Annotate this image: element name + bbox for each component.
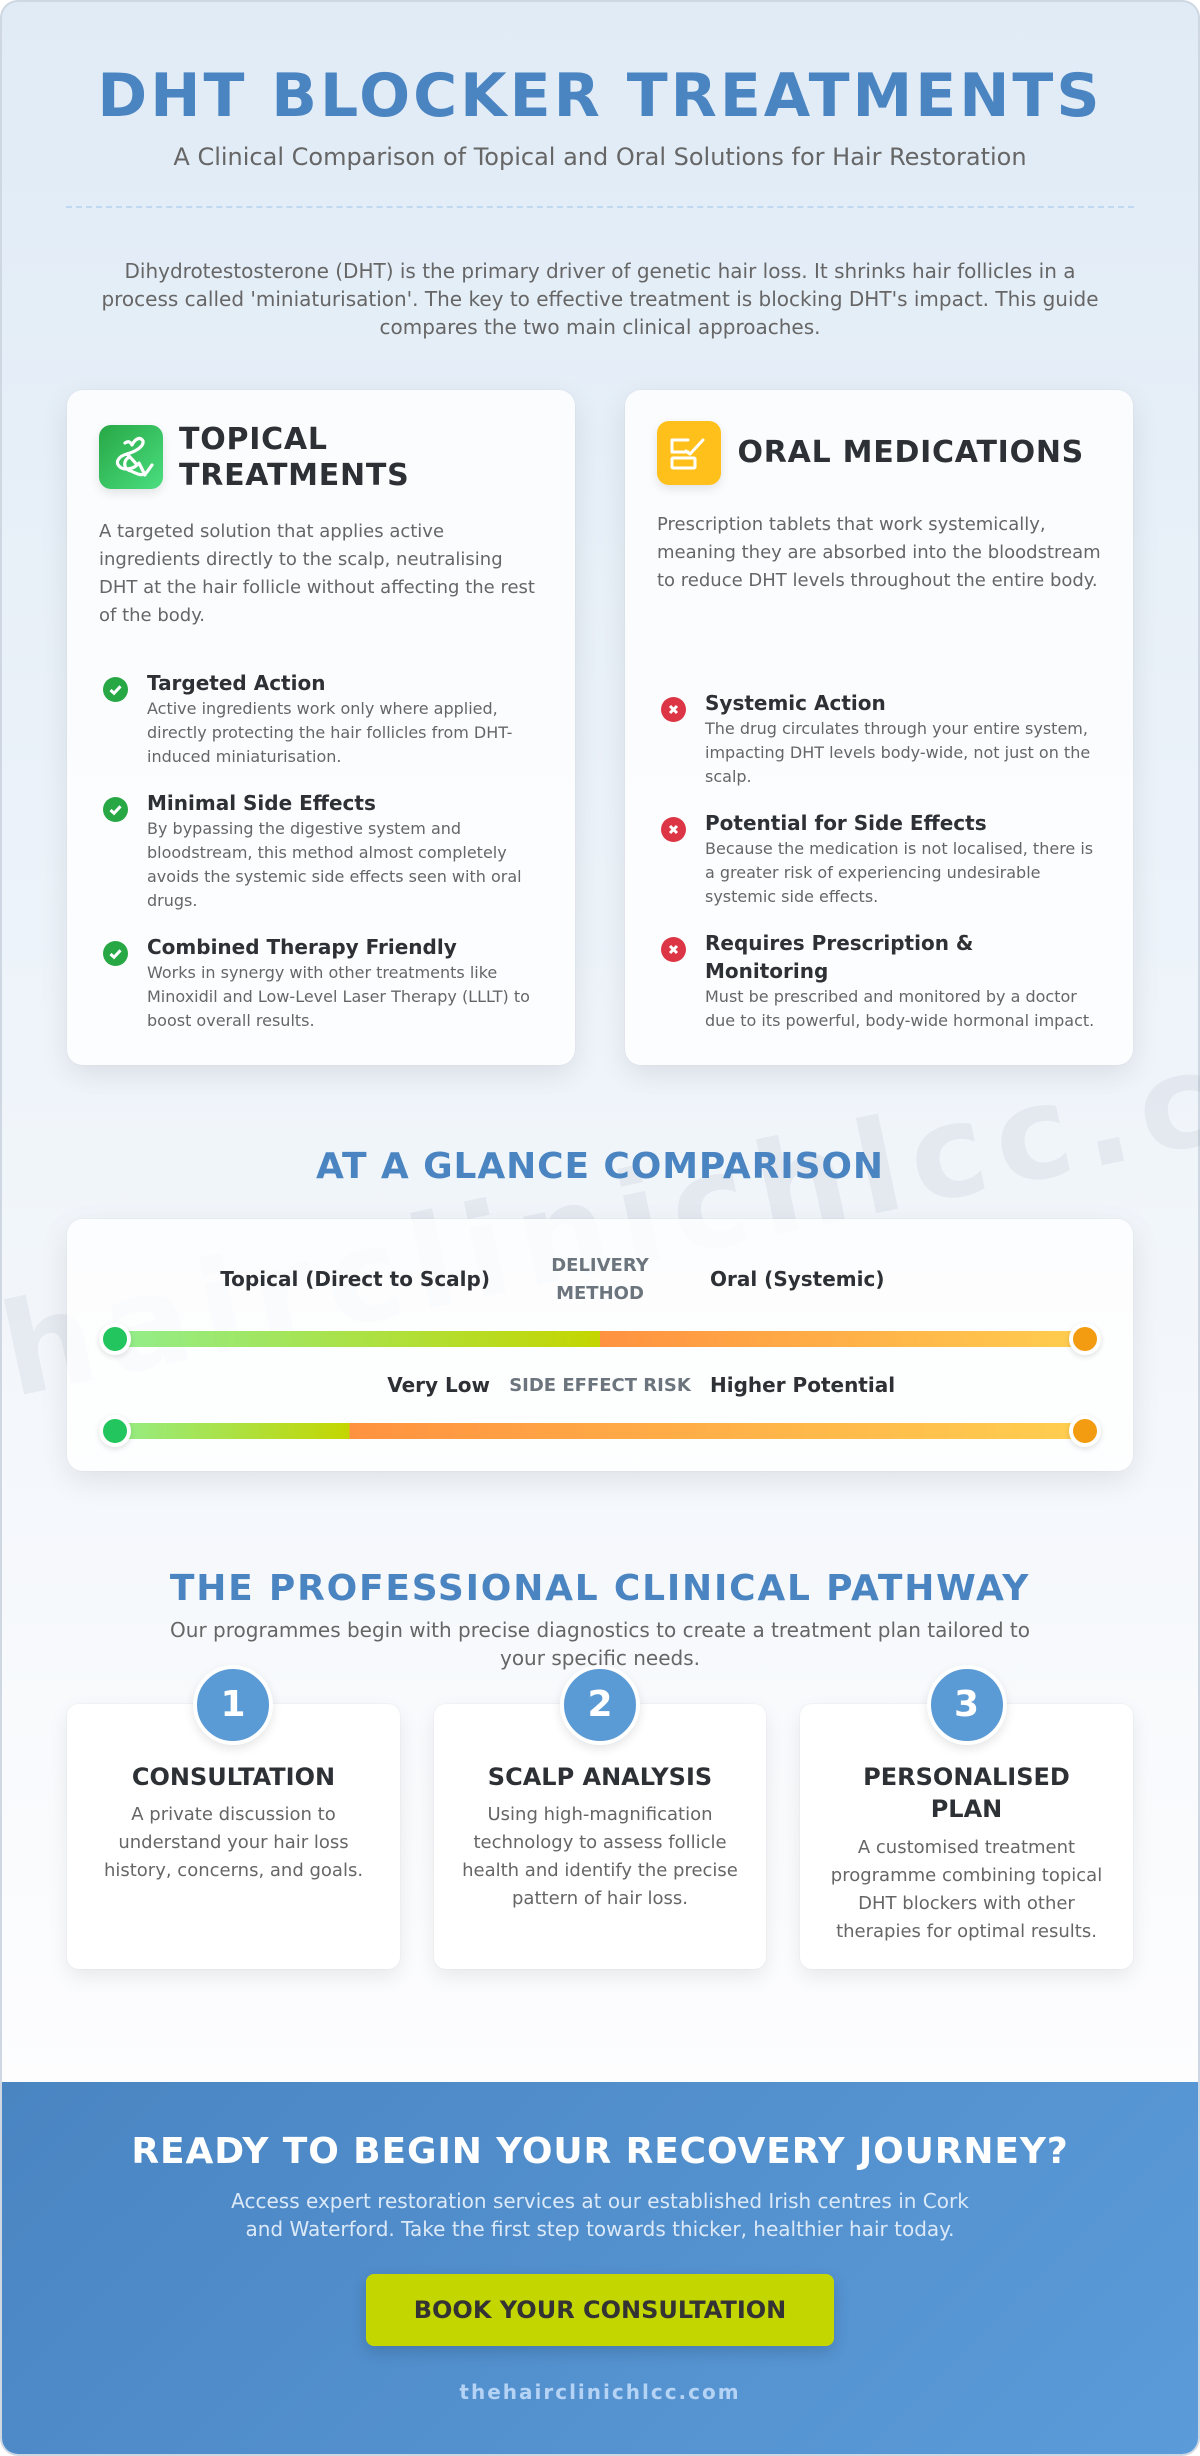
label: topical delivery: Topical (Direct to Scalp): [220, 1267, 490, 1291]
label: delivery method: DELIVERY: [551, 1254, 649, 1276]
label: delivery method: METHOD: [556, 1282, 644, 1304]
number badge: 2: [587, 1684, 613, 1725]
item text: systemic side effects.: [705, 886, 878, 906]
label: very low: Very Low: [387, 1372, 490, 1396]
step text: technology to assess follicle: [473, 1832, 727, 1853]
heading: at a glance comparison: AT A GLANCE COMPARISON: [316, 1146, 884, 1186]
icon: check: [103, 677, 128, 702]
website url: thehairclinichlcc.com: [459, 2380, 741, 2404]
list item: targeted action: [103, 670, 512, 766]
description: Prescription tablets that work systemically,: [657, 514, 1046, 534]
label: side effect risk: SIDE EFFECT RISK: [509, 1374, 691, 1396]
heading: professional clinical pathway: THE PROFESSIONAL CLINICAL PATHWAY: [170, 1568, 1030, 1608]
description: of the body.: [99, 604, 205, 626]
step text: history, concerns, and goals.: [104, 1860, 363, 1881]
dot: higher: [1069, 1415, 1101, 1447]
step text: A private discussion to: [131, 1804, 336, 1825]
icon: cross: [661, 697, 686, 722]
item text: [705, 838, 1093, 906]
step heading: PERSONALISED: [863, 1763, 1070, 1791]
dot: very low: [99, 1415, 131, 1447]
intro paragraph: compares the two main clinical approaches.: [379, 314, 820, 338]
item text: induced miniaturisation.: [147, 746, 342, 766]
item text: a greater risk of experiencing undesirable: [705, 862, 1040, 882]
step text: health and identify the precise: [462, 1860, 738, 1881]
cta heading: READY TO BEGIN YOUR RECOVERY JOURNEY?: [131, 2130, 1069, 2172]
step text: DHT blockers with other: [858, 1892, 1075, 1914]
intro paragraph: Dihydrotestosterone (DHT) is the primary driver of genetic hair loss. It shrinks hair follicles in a: [124, 258, 1076, 282]
item heading: [705, 930, 973, 982]
item text: avoids the systemic side effects seen with oral: [147, 866, 522, 886]
description: [99, 520, 535, 626]
item text: due to its powerful, body-wide hormonal impact.: [705, 1010, 1094, 1030]
item heading: Requires Prescription &: [705, 930, 973, 954]
dot: oral: [1069, 1323, 1101, 1355]
label: oral delivery: Oral (Systemic): [710, 1267, 884, 1291]
description: [657, 514, 1101, 590]
step text: therapies for optimal results.: [836, 1920, 1097, 1942]
item text: scalp.: [705, 766, 752, 786]
step heading: PLAN: [931, 1795, 1002, 1823]
number badge: [560, 1665, 640, 1745]
step text: [104, 1804, 363, 1881]
icon: cross: [661, 937, 686, 962]
step text: [462, 1804, 738, 1909]
list item: potential for side effects: [661, 810, 1093, 906]
item text: [704, 718, 1090, 786]
cta text: [231, 2188, 969, 2240]
label: higher potential: Higher Potential: [710, 1372, 895, 1396]
list item: minimal side effects: [103, 790, 522, 910]
list item: systemic action: [661, 690, 1090, 786]
panel: topical treatments: [67, 390, 575, 1065]
item text: Active ingredients work only where applied,: [147, 698, 498, 718]
item text: bloodstream, this method almost completely: [147, 842, 507, 862]
icon: topical hand: [99, 425, 163, 489]
panel: step 2: [434, 1704, 766, 1969]
label: delivery method: [551, 1254, 649, 1304]
item heading: Potential for Side Effects: [705, 810, 987, 834]
description: A targeted solution that applies active: [99, 520, 444, 542]
item heading: Monitoring: [705, 958, 828, 982]
cta text: Access expert restoration services at our established Irish centres in Cork: [231, 2188, 969, 2212]
pathway intro text: your specific needs.: [500, 1646, 700, 1670]
heading: oral medications: ORAL MEDICATIONS: [738, 434, 1084, 470]
icon: prescription: [657, 421, 721, 485]
step text: understand your hair loss: [118, 1832, 349, 1853]
subtitle: A Clinical Comparison of Topical and Oral Solutions for Hair Restoration: [173, 143, 1027, 171]
item text: Must be prescribed and monitored by a doctor: [705, 986, 1077, 1006]
item heading: Combined Therapy Friendly: [147, 934, 457, 958]
item text: impacting DHT levels body-wide, not just on the: [705, 742, 1090, 762]
cta text: and Waterford. Take the first step towards thicker, healthier hair today.: [245, 2216, 954, 2240]
step text: Using high-magnification: [488, 1804, 712, 1825]
item text: drugs.: [147, 890, 197, 910]
pathway intro text: [170, 1618, 1030, 1670]
bar: side effect risk: [99, 1423, 1101, 1439]
intro paragraph: [101, 258, 1099, 338]
heading: topical treatments: [179, 422, 409, 492]
number badge: [926, 1665, 1006, 1745]
item text: [147, 962, 530, 1030]
description: meaning they are absorbed into the bloodstream: [657, 542, 1101, 562]
panel: comparison: [67, 1219, 1133, 1471]
title: DHT BLOCKER TREATMENTS: [97, 61, 1103, 131]
item text: The drug circulates through your entire system,: [705, 718, 1088, 738]
intro paragraph: process called 'miniaturisation'. The key to effective treatment is blocking DHT's impact. This guide: [101, 286, 1099, 310]
step heading: CONSULTATION: [132, 1763, 335, 1791]
dot: topical: [99, 1323, 131, 1355]
step text: programme combining topical: [831, 1864, 1102, 1886]
description: to reduce DHT levels throughout the entire body.: [657, 570, 1098, 590]
item text: boost overall results.: [147, 1010, 315, 1030]
item text: Minoxidil and Low-Level Laser Therapy (LLLT) to: [147, 986, 530, 1006]
step text: [831, 1836, 1102, 1942]
bar: delivery method: [99, 1331, 1101, 1347]
button: book your consultation: BOOK YOUR CONSULTATION: [414, 2296, 786, 2324]
item heading: Targeted Action: [147, 670, 325, 694]
heading: topical treatments: TOPICAL: [179, 422, 328, 456]
item heading: Systemic Action: [705, 690, 886, 714]
step heading: [863, 1763, 1070, 1823]
panel: oral medications: [625, 390, 1133, 1065]
item text: [147, 818, 522, 910]
icon: check: [103, 797, 128, 822]
panel: step 1: [67, 1704, 400, 1969]
button: book your consultation: [366, 2274, 834, 2346]
number badge: [193, 1665, 273, 1745]
item text: By bypassing the digestive system and: [147, 818, 461, 838]
pathway intro text: Our programmes begin with precise diagnostics to create a treatment plan tailored to: [170, 1618, 1030, 1642]
item text: [147, 698, 512, 766]
list item: combined therapy friendly: [103, 934, 530, 1030]
step text: pattern of hair loss.: [512, 1888, 688, 1909]
list item: requires prescription: [661, 930, 1094, 1030]
item text: directly protecting the hair follicles from DHT-: [147, 722, 512, 742]
number badge: 1: [220, 1684, 246, 1725]
description: ingredients directly to the scalp, neutralising: [99, 548, 503, 570]
panel: step 3: [800, 1704, 1133, 1969]
icon: cross: [661, 817, 686, 842]
number badge: 3: [954, 1684, 979, 1725]
panel: call to action: [2, 2082, 1198, 2454]
item text: Because the medication is not localised, there is: [705, 838, 1093, 858]
step heading: SCALP ANALYSIS: [488, 1763, 712, 1791]
heading: topical treatments: TREATMENTS: [179, 458, 409, 492]
step text: A customised treatment: [858, 1836, 1075, 1858]
icon: check: [103, 941, 128, 966]
item text: [705, 986, 1094, 1030]
item text: Works in synergy with other treatments like: [147, 962, 497, 982]
item heading: Minimal Side Effects: [147, 790, 376, 814]
description: DHT at the hair follicle without affecting the rest: [99, 576, 535, 598]
